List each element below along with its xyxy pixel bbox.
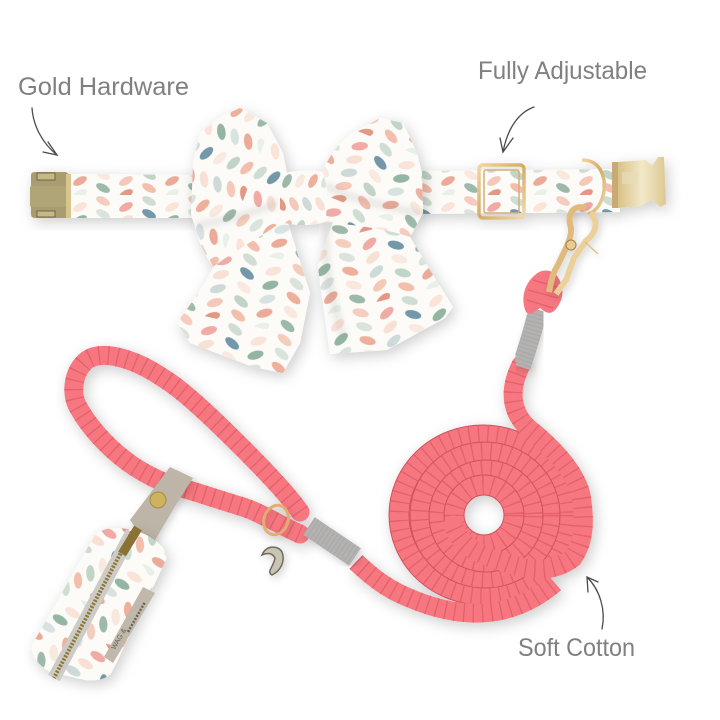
- leash: [74, 207, 598, 613]
- pouch body: [32, 528, 166, 680]
- collar band left: [68, 174, 200, 218]
- collar: [30, 157, 666, 218]
- rope knot at clasp: [523, 271, 562, 314]
- snap button: [150, 492, 166, 508]
- label: Soft Cotton: Soft Cotton: [518, 634, 635, 662]
- D-ring: [582, 160, 604, 214]
- rope coil: [356, 365, 583, 613]
- coil rings: [399, 435, 567, 595]
- rope strand from top over coil: [453, 365, 583, 569]
- zipper: [54, 528, 138, 678]
- rope tail bottom: [356, 562, 555, 613]
- left gold buckle: [30, 172, 71, 218]
- arrow: to gold buckle: [32, 108, 57, 155]
- leather tab: [130, 467, 193, 548]
- bow fold shading: [196, 185, 420, 340]
- bow right wing: [322, 118, 423, 237]
- rope handle loop: [74, 355, 300, 534]
- pouch label: WAG &: [111, 627, 128, 651]
- bow left tail: [177, 217, 310, 373]
- gold clasp: [549, 207, 598, 294]
- bow left wing: [191, 108, 287, 267]
- adjuster slide: [479, 165, 524, 218]
- sailor bow: [177, 108, 453, 373]
- right gold buckle: [612, 157, 666, 208]
- bow right tail: [318, 215, 453, 354]
- label: Fully Adjustable: Fully Adjustable: [478, 57, 647, 85]
- bow knot: [278, 171, 327, 225]
- charm ring and tag: [260, 502, 292, 575]
- pouch label: [104, 587, 155, 663]
- poop bag pouch: [32, 467, 193, 680]
- label: Gold Hardware: Gold Hardware: [18, 73, 189, 101]
- arrow: to adjuster: [500, 107, 534, 152]
- arrow: to rope: [587, 577, 603, 629]
- collar band right: [415, 169, 620, 214]
- silver sleeve lower: [309, 526, 355, 557]
- silver sleeve upper: [521, 310, 538, 367]
